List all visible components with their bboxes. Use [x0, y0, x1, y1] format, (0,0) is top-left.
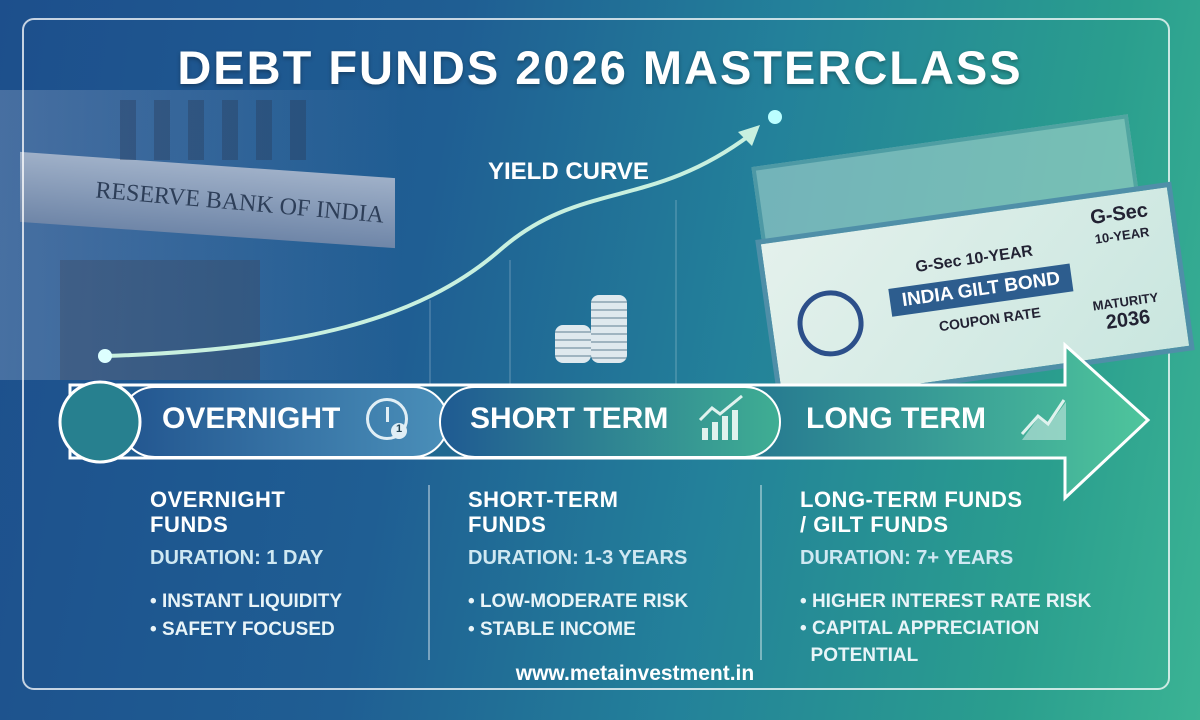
icon: coins: [555, 295, 627, 363]
panel: short-term funds: DURATION: 1-3 YEARS: [468, 547, 687, 569]
icon: bar chart up: [699, 395, 743, 440]
stage: overnight: OVERNIGHT: [162, 402, 340, 435]
building: Reserve Bank of India: [0, 90, 400, 380]
stage: long term: LONG TERM: [806, 402, 986, 435]
icon: clock: [366, 398, 408, 440]
panel: overnight funds: INSTANT LIQUIDITY: [162, 591, 342, 612]
panel: overnight funds: DURATION: 1 DAY: [150, 547, 323, 569]
icon: trend up: [1021, 399, 1066, 440]
footer url: www.metainvestment.in: [516, 662, 754, 685]
panel: short-term funds: FUNDS: [468, 512, 546, 537]
panel: long-term funds: [800, 487, 1092, 666]
panel: overnight funds: [150, 487, 342, 640]
panel: short-term funds: LOW-MODERATE RISK: [480, 591, 688, 612]
panel: short-term funds: [468, 487, 688, 640]
panel: overnight funds: FUNDS: [150, 512, 228, 537]
title: DEBT FUNDS 2026 MASTERCLASS: [177, 41, 1023, 94]
panel: long-term funds: HIGHER INTEREST RATE RISK: [812, 591, 1091, 612]
panel: short-term funds: SHORT-TERM: [468, 487, 618, 512]
label: yield curve: YIELD CURVE: [488, 158, 649, 185]
icon: clock: 1: [396, 423, 402, 435]
panel: long-term funds: LONG-TERM FUNDS: [800, 487, 1023, 512]
timeline arrow: [58, 342, 1150, 502]
panel: long-term funds: / GILT FUNDS: [800, 512, 949, 537]
panel: long-term funds: POTENTIAL: [811, 645, 918, 666]
dividers: [428, 485, 430, 660]
panel: overnight funds: OVERNIGHT: [150, 487, 285, 512]
bond certificates: 2036: [1104, 306, 1152, 334]
panel: long-term funds: DURATION: 7+ YEARS: [800, 547, 1013, 569]
bond certificates: 10-YEAR: [1094, 224, 1150, 247]
building: Reserve Bank of India: RESERVE BANK OF INDIA: [94, 177, 385, 229]
bond certificates: INDIA GILT BOND: [901, 268, 1061, 311]
bond certificates: COUPON RATE: [938, 304, 1042, 334]
bond certificates: MATURITY: [1092, 290, 1159, 314]
bond certificates: G-Sec: [1089, 199, 1149, 229]
bond certificates: G-Sec 10-YEAR: [914, 243, 1034, 276]
panel: short-term funds: STABLE INCOME: [480, 619, 636, 640]
stage: short term: SHORT TERM: [470, 402, 668, 435]
panel: overnight funds: SAFETY FOCUSED: [162, 619, 335, 640]
bond certificates: [751, 114, 1195, 384]
panel: long-term funds: CAPITAL APPRECIATION: [812, 618, 1039, 639]
